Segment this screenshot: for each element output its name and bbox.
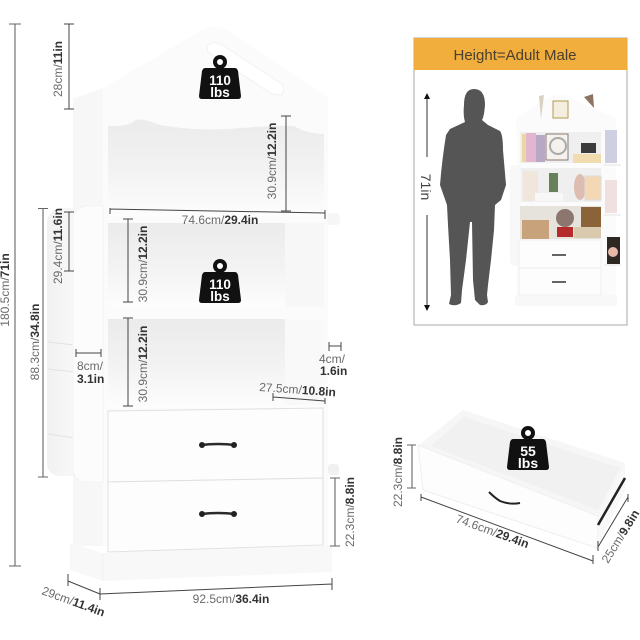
bottom shelf with basket and toys bbox=[520, 206, 601, 239]
panel header bbox=[414, 38, 627, 70]
dimension: drawer front height: 22.3cm/8.8in bbox=[391, 437, 405, 507]
panel header: Height=Adult Male bbox=[454, 47, 576, 64]
roof decor bbox=[539, 94, 594, 119]
weight badge: roof: lbs bbox=[210, 85, 230, 100]
male silhouette bbox=[440, 89, 506, 305]
mini bookcase bbox=[510, 94, 621, 306]
dimension: shelf 3 height bbox=[123, 318, 150, 406]
dimension: roof height: 28cm/11in bbox=[51, 41, 65, 97]
weight badge: drawer: lbs bbox=[518, 455, 538, 471]
dimension: shelf 2 height bbox=[123, 219, 150, 302]
height comparison panel bbox=[391, 38, 640, 566]
top shelf with books bbox=[516, 122, 616, 163]
dimension: shelf 1 height: 30.9cm/12.2in bbox=[265, 123, 279, 199]
dimension: small depth bbox=[319, 342, 347, 378]
drawer handle bbox=[489, 492, 520, 504]
weight badge: shelf: 110 bbox=[209, 277, 231, 292]
dimension: panel width: 3.1in bbox=[77, 372, 104, 386]
dimension: small depth: 1.6in bbox=[320, 364, 347, 378]
open drawer bbox=[418, 410, 625, 548]
dimension: panel width: 8cm/ bbox=[77, 359, 104, 373]
mini drawers bbox=[519, 240, 601, 295]
dimension: side shelf gap: 29.4cm/11.6in bbox=[51, 208, 65, 284]
dimension: roof height bbox=[51, 24, 74, 109]
dimension: overall depth: 29cm/11.4in bbox=[40, 584, 107, 619]
dimension: panel width bbox=[76, 349, 104, 386]
height arrow: 71in bbox=[418, 174, 434, 200]
dimension: drawer width: 74.6cm/29.4in bbox=[454, 512, 531, 551]
dimension: side height bbox=[28, 208, 48, 477]
dimension: interior width: 74.6cm/29.4in bbox=[182, 213, 258, 227]
dimension: drawer front height bbox=[391, 437, 416, 507]
drawer runner bbox=[598, 478, 625, 525]
dimension: shelf 1 height bbox=[265, 116, 291, 211]
middle shelf with decor bbox=[521, 168, 601, 202]
right knobs bbox=[327, 213, 340, 225]
dimension: drawer height bbox=[330, 477, 357, 547]
shelf interiors bbox=[108, 120, 324, 216]
left front panel bbox=[73, 206, 103, 482]
plinth bbox=[70, 543, 332, 581]
height arrow bbox=[418, 93, 434, 311]
dimension: shelf 2 height: 30.9cm/12.2in bbox=[136, 226, 150, 302]
dimension: side shelf gap bbox=[51, 208, 74, 284]
weight badge: shelf: lbs bbox=[210, 289, 230, 304]
dimension: overall width bbox=[100, 578, 332, 606]
side decor bbox=[604, 130, 621, 265]
cabinet body with house roof bbox=[73, 27, 328, 546]
bookcase bbox=[47, 27, 340, 581]
weight badge: roof: 110 bbox=[209, 73, 231, 88]
dimension: drawer height: 22.3cm/8.8in bbox=[343, 477, 357, 547]
dimension: small depth: 4cm/ bbox=[319, 352, 346, 366]
dimension: overall width: 92.5cm/36.4in bbox=[193, 592, 269, 606]
weight badge: roof bbox=[199, 55, 241, 100]
dimension: total height bbox=[0, 24, 21, 566]
dimension: side height: 88.3cm/34.8in bbox=[28, 304, 42, 380]
weight badge: shelf bbox=[199, 259, 241, 304]
roof cut-out bbox=[207, 43, 284, 95]
drawer upper bbox=[108, 408, 323, 482]
drawer lower bbox=[108, 478, 323, 552]
weight badge: drawer bbox=[507, 426, 549, 471]
weight badge: drawer: 55 bbox=[520, 443, 536, 459]
side shelf panel bbox=[47, 208, 80, 476]
dimension: interior width bbox=[110, 208, 325, 227]
dimension: shelf depth: 27.5cm/10.8in bbox=[259, 380, 336, 399]
dimension: drawer width bbox=[421, 494, 593, 564]
dimension: shelf 3 height: 30.9cm/12.2in bbox=[136, 326, 150, 402]
